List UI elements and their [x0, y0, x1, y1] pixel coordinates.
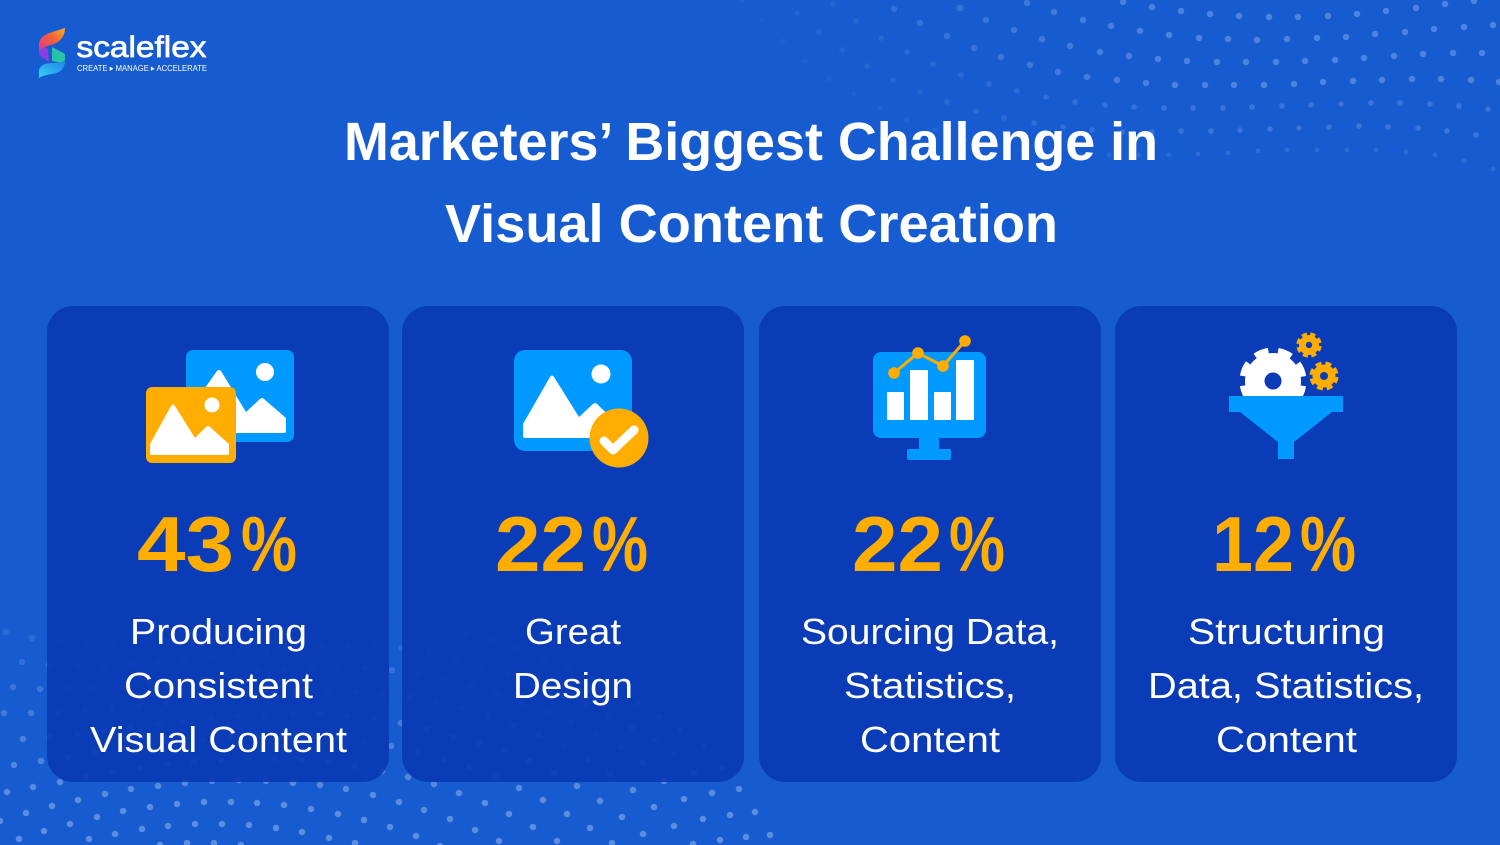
logo: scaleflex [39, 28, 207, 78]
stat: 22%: % [592, 500, 648, 588]
label: producing consistent visual content: Visual Content [90, 719, 347, 760]
panel: great design [402, 306, 744, 782]
title: Marketers’ Biggest Challenge in [344, 112, 1158, 172]
stat: 43%: 43 [137, 500, 234, 588]
stat: 22% [852, 500, 1005, 588]
logo wordmark: scaleflex [76, 31, 206, 64]
label: sourcing data, statistics, content: Content [860, 719, 1000, 760]
label: producing consistent visual content [90, 611, 347, 760]
label: sourcing data, statistics, content [801, 611, 1059, 760]
stat: 22%: % [949, 500, 1005, 588]
title [344, 112, 1158, 254]
logo mark [39, 28, 65, 78]
icon: image with check badge [514, 350, 648, 468]
icon: monitor with chart [873, 335, 986, 460]
label: sourcing data, statistics, content: Statistics, [844, 665, 1016, 706]
panel: sourcing data, statistics, content [759, 306, 1101, 782]
stat: 12%: 12 [1212, 500, 1294, 588]
stat: 12%: % [1300, 500, 1356, 588]
label: producing consistent visual content: Consistent [124, 665, 313, 706]
logo tagline: CREATE ▸ MANAGE ▸ ACCELERATE [77, 63, 207, 73]
icon: overlapping images [146, 350, 294, 463]
label: sourcing data, statistics, content: Sourcing Data, [801, 611, 1059, 652]
label: producing consistent visual content: Producing [130, 611, 307, 652]
panel: structuring data, statistics, content [1115, 306, 1457, 782]
stat: 12% [1212, 500, 1356, 588]
stat: 22% [495, 500, 648, 588]
stat: 43%: % [241, 500, 297, 588]
label: structuring data, statistics, content: Content [1216, 719, 1357, 760]
panel: producing consistent visual content [47, 306, 389, 782]
stat: 22%: 22 [852, 500, 943, 588]
label: great design: Great [525, 611, 621, 652]
icon: funnel with gears [1229, 334, 1343, 459]
label: great design [513, 611, 633, 706]
stat: 22%: 22 [495, 500, 586, 588]
label: structuring data, statistics, content: Data, Statistics, [1148, 665, 1424, 706]
label: structuring data, statistics, content [1148, 611, 1424, 760]
label: great design: Design [513, 665, 633, 706]
stat: 43% [137, 500, 297, 588]
label: structuring data, statistics, content: Structuring [1188, 611, 1385, 652]
title: Visual Content Creation [445, 194, 1058, 254]
